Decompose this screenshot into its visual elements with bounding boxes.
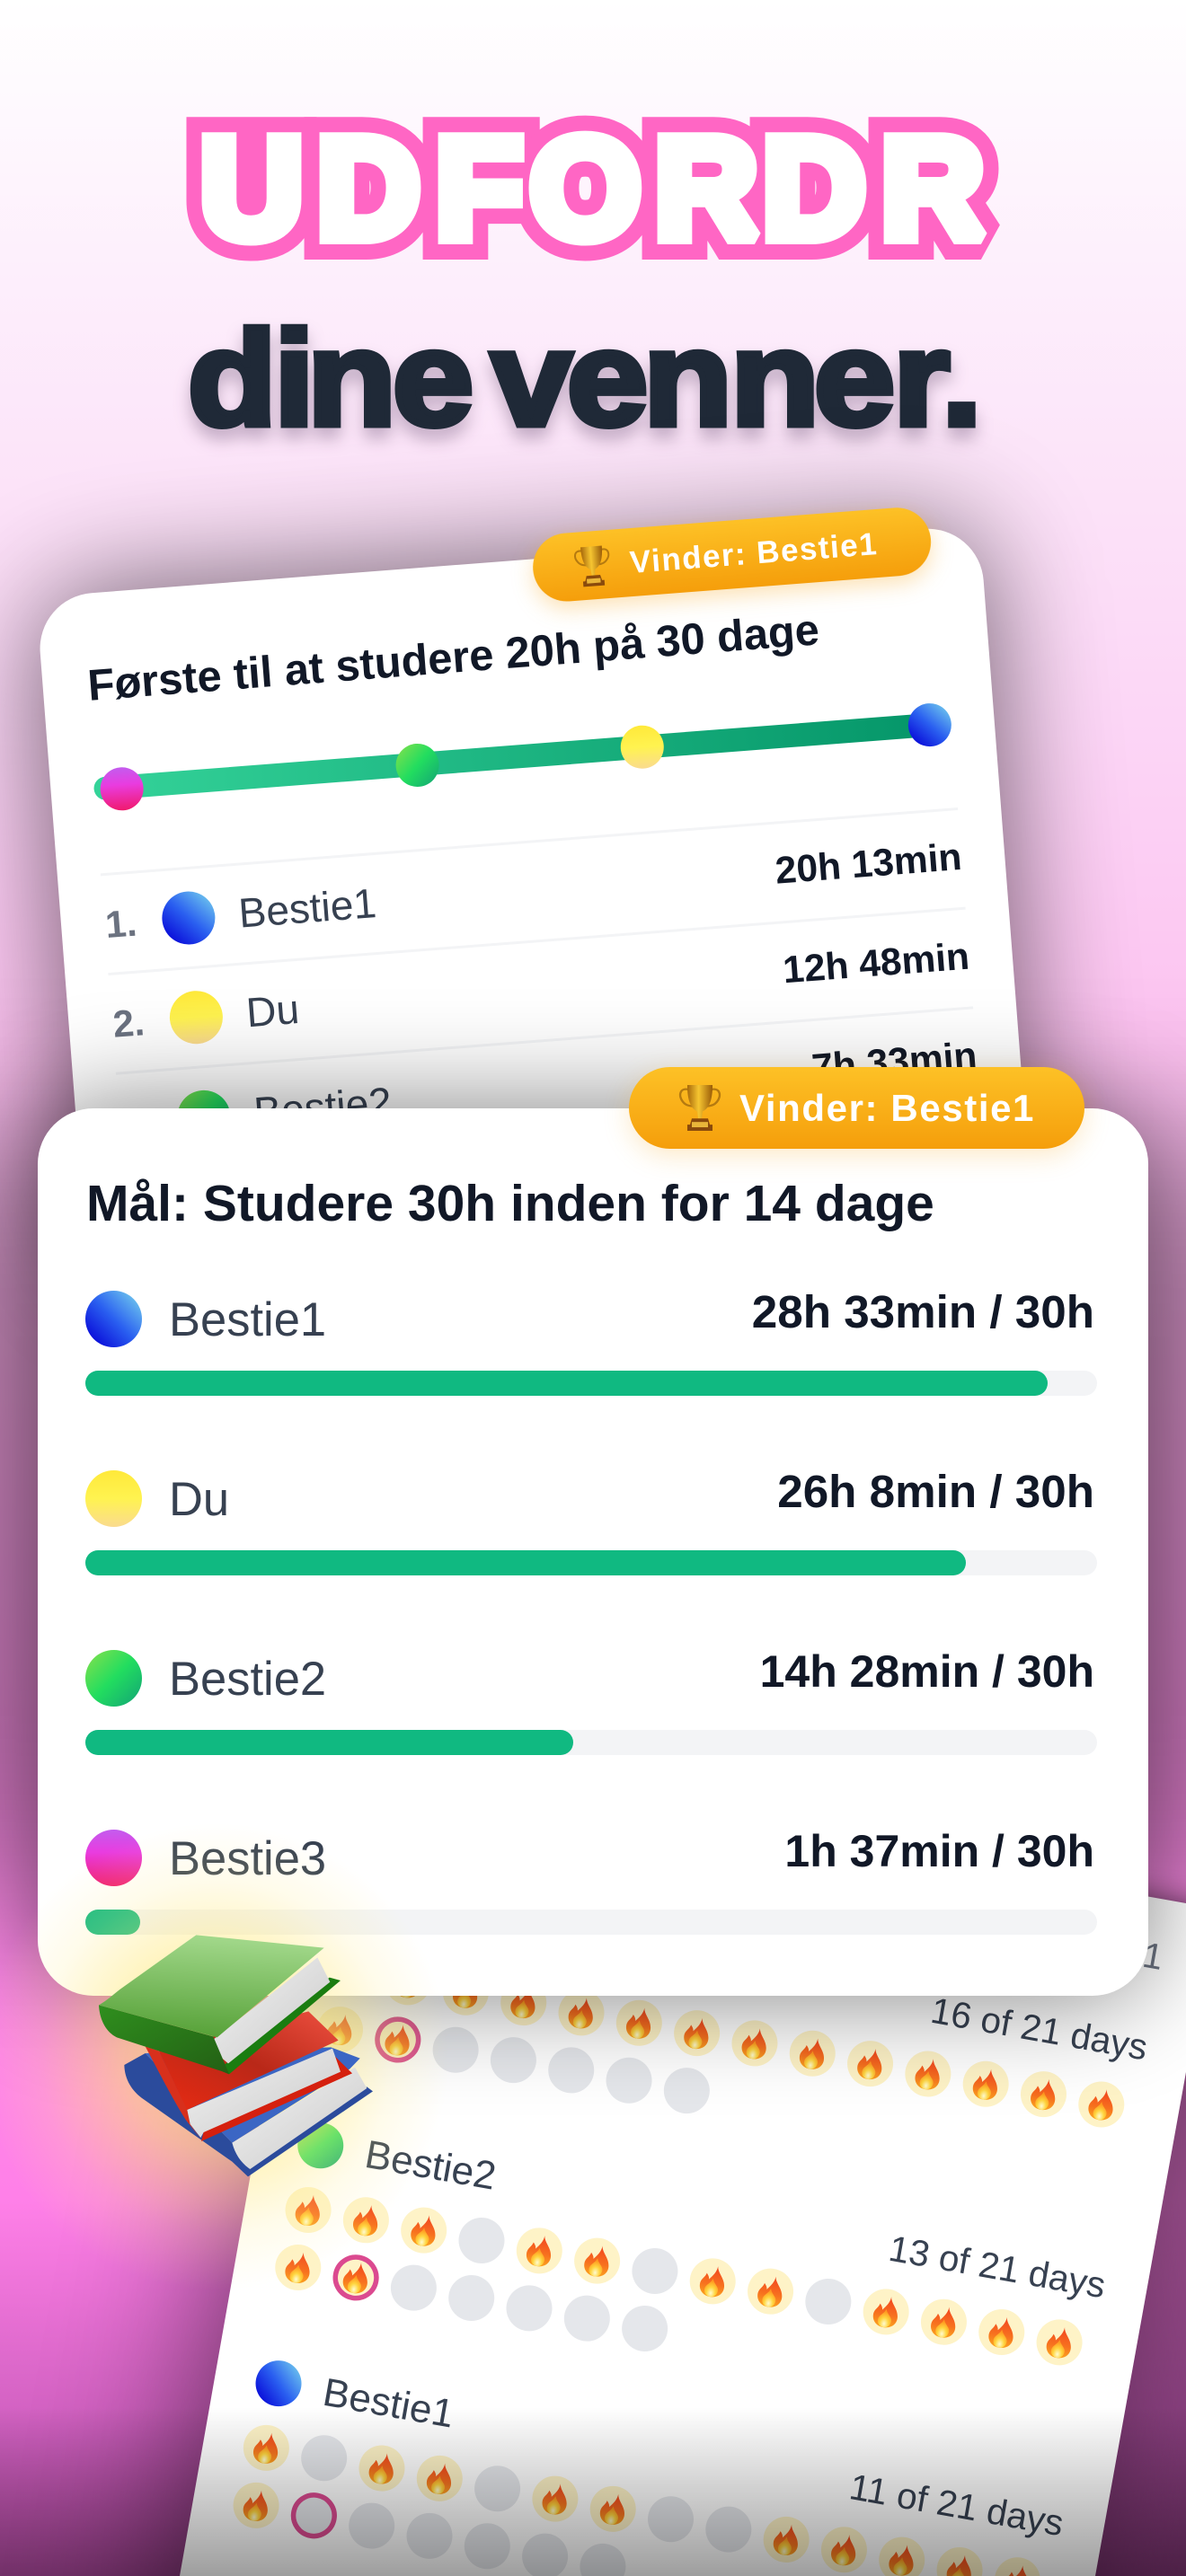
panel: race card (tilted, back) [36,525,1031,1278]
ranking row 1: Bestie1 [237,879,378,937]
streak row: Bestie1 [230,2357,1067,2576]
race card heading: Første til at studere 20h på 30 dage [86,605,821,710]
green book [99,1935,341,2074]
title: UDFORDR: UDFORDR [200,110,984,268]
goal row: Bestie1 [85,1286,1097,1396]
soft backdrop shade behind cards [0,1141,1186,1886]
icon: trophy [574,545,611,587]
goal row: Du [85,1466,1097,1575]
goal row: Bestie2 [85,1646,1097,1755]
ranking row 1 [103,832,964,951]
goal row: Bestie1: 28h 33min / 30h [752,1286,1094,1337]
race card shadow [36,525,1031,1278]
streak row: Bestie2: 13 of 21 days [886,2228,1109,2306]
ranking row 1: 20h 13min [774,836,963,893]
race progress track [93,701,953,813]
goal row: Bestie3: Bestie3 [169,1832,326,1885]
goal card shadow [38,1108,1148,1996]
goal card heading: Mål: Studere 30h inden for 14 dage [86,1175,934,1232]
ranking row 3: 7h 33min [810,1035,978,1090]
streak row: Bestie1: 11 of 21 days [846,2466,1067,2544]
race card winner badge [530,506,934,604]
blue book [124,2047,373,2176]
title: UDFORDR: UDFORDR [200,110,984,268]
icon: stack of books [99,1935,373,2177]
race card winner badge: Vinder: Bestie1 [629,526,879,580]
goal row: Bestie3: 1h 37min / 30h [784,1826,1094,1876]
bottom edge shade [0,2407,1186,2576]
ranking row 2 [111,931,971,1050]
ranking row 3 [119,1031,979,1150]
ranking row 3: Bestie2 [252,1078,394,1135]
ranking row 2: 2. [111,1001,146,1045]
red book [146,2011,352,2141]
goal card winner badge: Vinder: Bestie1 [739,1087,1035,1129]
subtitle: dine venner: dine venner. [188,304,982,454]
goal row: Du: 26h 8min / 30h [777,1466,1094,1517]
goal row: Bestie2: 14h 28min / 30h [760,1646,1094,1697]
streak card contents [230,1796,1166,2576]
streak row: Bestie1: Bestie1 [320,2370,457,2437]
partial label: 1 [1139,1936,1166,1978]
ranking row 2: 12h 48min [782,936,971,992]
right side dark shade [988,2021,1186,2576]
goal row: Bestie2: Bestie2 [169,1653,326,1706]
goal row: Bestie1: Bestie1 [169,1293,326,1346]
panel: goal card (front) [38,1108,1148,1996]
goal card winner badge [629,1067,1084,1149]
streak row: Bestie2: Bestie2 [362,2132,500,2199]
streak count: Bestie3: 16 of 21 days [928,1989,1151,2068]
ranking row 3: 3. [119,1100,154,1144]
panel: streak card (tilted, back) [83,1877,1186,2576]
streak dots: Bestie3 [314,1945,1128,2189]
ranking row 1: 1. [103,902,138,946]
streak row: Bestie2 [271,2119,1110,2429]
goal row: Bestie3 [85,1826,1097,1935]
goal row: Du: Du [169,1473,229,1526]
glow behind books [0,1823,449,2290]
icon: trophy [680,1085,720,1131]
ranking row 2: Du [244,985,301,1036]
